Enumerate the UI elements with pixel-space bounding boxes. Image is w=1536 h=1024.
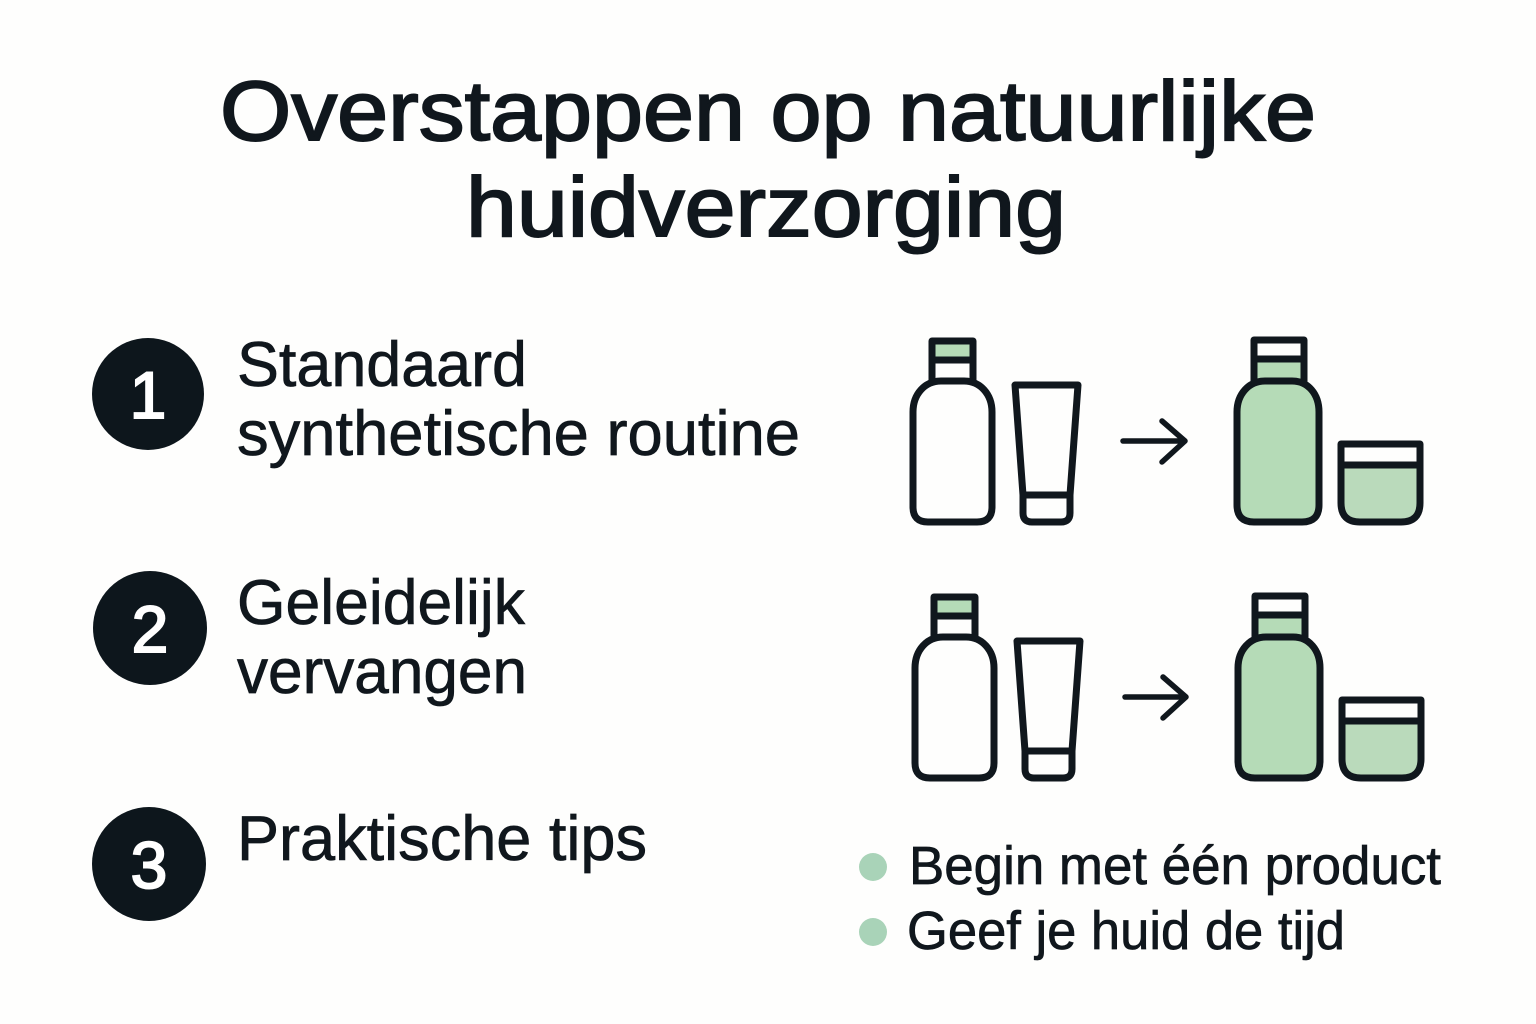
number badge 3: 3	[131, 828, 167, 902]
tip: give your skin time: Geef je huid de tijd	[907, 901, 1345, 961]
icon: synthetic bottle	[915, 597, 994, 778]
icon: natural jar	[1341, 444, 1420, 522]
step 1 label	[237, 330, 800, 469]
arrow	[1123, 421, 1185, 462]
product swap row 2	[915, 596, 1421, 778]
step 1 label: Standaard	[237, 330, 527, 400]
step 1: standard synthetic routine	[92, 330, 800, 469]
icon: synthetic tube	[1015, 385, 1078, 522]
arrow	[1125, 677, 1186, 718]
number badge 1	[92, 338, 204, 450]
step 2 label: Geleidelijk	[237, 568, 525, 638]
number badge 1: 1	[130, 358, 166, 432]
number badge 2: 2	[132, 592, 168, 666]
step 3 label: Praktische tips	[237, 804, 647, 874]
step 3: practical tips	[92, 804, 647, 921]
step 2 label: vervangen	[237, 637, 527, 707]
icon: synthetic tube	[1017, 641, 1080, 778]
step 2 label	[237, 568, 527, 707]
tip: start with one product: Begin met één product	[909, 836, 1441, 896]
title	[220, 64, 1316, 254]
icon: synthetic bottle	[913, 341, 992, 522]
product swap row 1	[913, 340, 1420, 522]
icon: natural jar	[1342, 700, 1421, 778]
icon: natural bottle	[1237, 340, 1319, 522]
icon: natural bottle	[1238, 596, 1320, 778]
step 2: gradually replace	[93, 568, 527, 707]
title: Overstappen op natuurlijke	[220, 64, 1316, 158]
number badge 3	[92, 807, 206, 921]
number badge 2	[93, 571, 207, 685]
title: huidverzorging	[466, 160, 1066, 254]
step 1 label: synthetische routine	[237, 399, 800, 469]
